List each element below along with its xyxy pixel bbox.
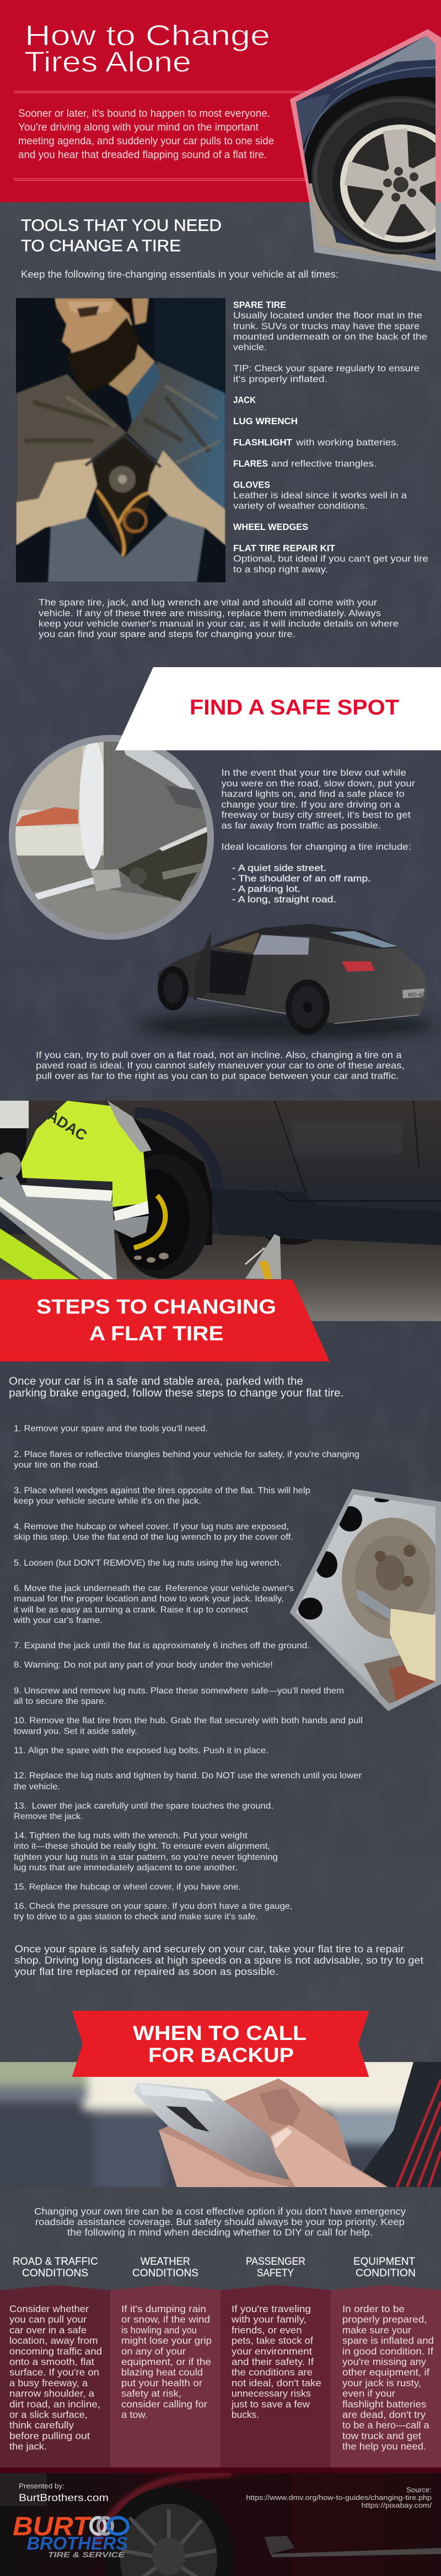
- column: weather conditions: put your health or: [121, 2377, 202, 2388]
- column: road and traffic conditions: location, away from: [9, 2335, 98, 2346]
- column: equipment condition: spare is inflated and: [342, 2335, 434, 2346]
- safe spot closing paragraph: pull over as far to the right as you can to put space between your car and traffic.: [36, 1071, 399, 1081]
- tools list: SPARE TIRE: [233, 300, 286, 310]
- backup intro text: [34, 2206, 406, 2238]
- image: black car with open door: MD-42: [408, 992, 424, 998]
- banner: steps to changing a flat tire: STEPS TO CHANGING: [36, 1296, 276, 1318]
- banner: steps to changing a flat tire: A FLAT TIRE: [89, 1322, 224, 1345]
- safe spot text: - A quiet side street.: [232, 863, 326, 873]
- steps closing paragraph: shop. Driving long distances at high speeds on a spare is not advisable, so try to get: [14, 1955, 423, 1966]
- column: road and traffic conditions: a busy freeway, a: [9, 2377, 88, 2388]
- steps intro: parking brake engaged, follow these steps to change your flat tire.: [9, 1387, 343, 1399]
- tools list: WHEEL WEDGES: [233, 522, 308, 532]
- intro text: You're driving along with your mind on the important: [18, 121, 259, 133]
- steps list: it will be as easy as turning a crank. Raise it up to connect: [14, 1605, 249, 1615]
- tools list: mounted underneath or on the back of the: [233, 332, 427, 342]
- steps closing paragraph: your flat tire replaced or repaired as soon as possible.: [14, 1966, 278, 1977]
- tools list: variety of weather conditions.: [233, 501, 368, 511]
- steps list: 14. Tighten the lug nuts with the wrench. Put your weight: [14, 1831, 248, 1841]
- steps list: 3. Place wheel wedges against the tires opposite of the flat. This will help: [14, 1486, 310, 1496]
- column: equipment condition: your jack is rusty,: [342, 2377, 421, 2388]
- steps list: tighten your lug nuts in a star pattern, so you're never tightening: [14, 1853, 278, 1862]
- footer: sources: https://pixabay.com/: [362, 2502, 432, 2509]
- column: road and traffic conditions: onto a smooth, flat: [9, 2356, 94, 2367]
- dark red divider band: [0, 2467, 441, 2473]
- column: passenger safety: not ideal, don't take: [232, 2377, 321, 2388]
- steps list: the vehicle.: [14, 1782, 60, 1792]
- safe spot text: - The shoulder of an off ramp.: [232, 874, 370, 884]
- section heading: tools: TO CHANGE A TIRE: [21, 237, 181, 255]
- steps list: 12. Replace the lug nuts and tighten by hand. Do NOT use the wrench until you lower: [14, 1771, 362, 1781]
- column: equipment condition: EQUIPMENT: [353, 2256, 415, 2267]
- column: road and traffic conditions: think carefully: [9, 2420, 74, 2431]
- safe spot text: [222, 768, 416, 905]
- safe spot text: Ideal locations for changing a tire include:: [222, 842, 411, 852]
- section heading: tools: TOOLS THAT YOU NEED: [21, 217, 222, 235]
- safe spot closing paragraph: paved road is ideal. If you cannot safely maneuver your car to one of these areas,: [36, 1060, 405, 1070]
- logo: Burt Brothers Tire & Service: [13, 2512, 128, 2559]
- safe spot closing paragraph: If you can, try to pull over on a flat road, not an incline. Also, changing a tire on a: [36, 1050, 402, 1060]
- steps list: 13. Lower the jack carefully until the spare touches the ground.: [14, 1801, 273, 1811]
- column: road and traffic conditions: you can pull your: [9, 2314, 87, 2325]
- column: road and traffic conditions: before pulling out: [9, 2430, 90, 2441]
- banner: when to call for backup: [72, 2011, 369, 2077]
- steps list: Remove the jack.: [14, 1812, 83, 1821]
- steps list: 16. Check the pressure on your spare. If you don't have a tire gauge,: [14, 1902, 293, 1911]
- tools list: Optional, but ideal if you can't get your tire: [233, 554, 428, 564]
- steps intro: [9, 1376, 343, 1399]
- steps list: 15. Replace the hubcap or wheel cover, if you have one.: [14, 1882, 241, 1892]
- column: weather conditions: might lose your grip: [121, 2335, 212, 2346]
- safe spot text: you were on the road, slow down, put your: [222, 779, 416, 789]
- column: passenger safety: SAFETY: [257, 2267, 294, 2279]
- backup intro text: the following in mind when deciding whether to DIY or call for help.: [67, 2227, 373, 2238]
- banner: when to call for backup: FOR BACKUP: [148, 2044, 294, 2066]
- column: weather conditions: equipment, or if the: [121, 2356, 211, 2367]
- footer: sources: Source:: [406, 2486, 432, 2494]
- banner: steps to changing a flat tire: [0, 1280, 330, 1362]
- steps list: with your car's frame.: [13, 1616, 103, 1625]
- banner: find a safe spot: [115, 667, 441, 750]
- steps list: 11. Align the spare with the exposed lug bolts. Push it in place.: [14, 1746, 268, 1755]
- steps list: 4. Remove the hubcap or wheel cover. If your lug nuts are exposed,: [14, 1522, 289, 1531]
- image: wrench on steel wheel in angled frame: [290, 1487, 441, 1711]
- tools closing paragraph: keep your vehicle owner's manual in your car, as it will include details on where: [39, 619, 399, 629]
- column: road and traffic conditions: the jack.: [9, 2441, 47, 2452]
- column: road and traffic conditions: ROAD & TRAFFIC: [13, 2256, 98, 2267]
- steps list: 5. Loosen (but DON'T REMOVE) the lug nuts using the lug wrench.: [14, 1558, 282, 1568]
- steps list: [13, 1424, 363, 1922]
- steps list: your tire on the road.: [14, 1460, 100, 1470]
- column: passenger safety: and their safety. If: [232, 2356, 314, 2367]
- backup intro text: roadside assistance coverage. But safety should always be your top priority. Keep: [35, 2216, 405, 2227]
- column: passenger safety: friends, or even: [232, 2324, 302, 2335]
- tools list: [233, 300, 428, 575]
- steps list: lug nuts that are immediately adjacent to one another.: [14, 1863, 238, 1873]
- column: passenger safety: PASSENGER: [246, 2256, 305, 2267]
- tools list: Usually located under the floor mat in the: [233, 311, 422, 321]
- column: passenger safety: bucks.: [232, 2409, 259, 2420]
- tools list: with working batteries.: [295, 437, 399, 447]
- image: roadside worker changing tire: [0, 1101, 441, 1321]
- steps closing paragraph: [14, 1943, 423, 1977]
- steps list: 2. Place flares or reflective triangles behind your vehicle for safety, if you're changing: [14, 1450, 359, 1459]
- column: weather conditions: on any of your: [121, 2346, 186, 2357]
- column: equipment condition: [331, 2256, 441, 2467]
- tools list: it's properly inflated.: [233, 374, 327, 384]
- tools intro sentence: Keep the following tire-changing essentials in your vehicle at all times:: [21, 269, 338, 280]
- steps list: all to secure the spare.: [14, 1697, 106, 1706]
- column: passenger safety: [220, 2256, 331, 2467]
- column: road and traffic conditions: car over in a safe: [9, 2324, 87, 2335]
- safe spot text: freeway or busy city street, it's best to get: [222, 810, 411, 820]
- column: road and traffic conditions: narrow shoulder, a: [9, 2388, 94, 2399]
- logo: Burt Brothers Tire & Service: BURT: [13, 2512, 92, 2541]
- steps list: skip this step. Use the flat end of the lug wrench to pry the cover off.: [14, 1533, 293, 1542]
- footer: sources: [246, 2486, 432, 2509]
- image: man opening shirt to show gears: [16, 298, 225, 582]
- tools list: FLARES: [233, 459, 268, 469]
- steps list: keep your vehicle secure while it's on the jack.: [14, 1497, 201, 1506]
- column: equipment condition: in good condition. If: [342, 2346, 433, 2357]
- tools closing paragraph: [39, 598, 399, 640]
- column: weather conditions: safety at risk,: [121, 2388, 181, 2399]
- steps list: into it—these should be really tight. To ensure even alignment,: [14, 1842, 270, 1851]
- column: road and traffic conditions: or a slick surface,: [9, 2409, 88, 2420]
- column: passenger safety: the conditions are: [232, 2367, 313, 2378]
- section heading: tools: [21, 217, 222, 255]
- logo: Burt Brothers Tire & Service: TIRE & SERVICE: [48, 2551, 125, 2559]
- column: weather conditions: a tow.: [121, 2409, 148, 2420]
- column: equipment condition: In order to be: [342, 2303, 405, 2314]
- column: weather conditions: If it's dumping rain: [121, 2303, 206, 2314]
- image: jack under tire in circular frame: [9, 735, 215, 942]
- title: Tires Alone: [24, 46, 191, 78]
- steps list: 1. Remove your spare and the tools you'll need.: [14, 1424, 208, 1433]
- column: equipment condition: make sure your: [342, 2324, 411, 2335]
- column: equipment condition: even if your: [342, 2388, 395, 2399]
- column: passenger safety: with your family,: [231, 2314, 306, 2325]
- safe spot text: - A parking lot.: [232, 884, 300, 894]
- tools list: GLOVES: [233, 480, 270, 490]
- steps list: 7. Expand the jack until the flat is approximately 6 inches off the ground.: [14, 1641, 310, 1650]
- column: equipment condition: the help you need.: [342, 2441, 426, 2452]
- footer: presented by: [19, 2482, 109, 2503]
- title: [24, 20, 270, 78]
- column: equipment condition: properly prepared,: [342, 2314, 427, 2325]
- column: equipment condition: flashlight batteries: [342, 2399, 427, 2410]
- column: weather conditions: CONDITIONS: [132, 2267, 198, 2279]
- steps list: try to drive to a gas station to check and make sure it's safe.: [14, 1912, 258, 1922]
- steps list: manual for the proper location and how to work your jack. Ideally,: [14, 1594, 284, 1604]
- column: road and traffic conditions: oncoming traffic and: [9, 2346, 102, 2357]
- intro text: [18, 107, 274, 161]
- logo: Burt Brothers Tire & Service: BROTHERS: [26, 2533, 128, 2553]
- panel: header red background: [0, 0, 441, 202]
- column: passenger safety: pets, take stock of: [232, 2335, 313, 2346]
- column: equipment condition: CONDITION: [356, 2267, 416, 2279]
- column: weather conditions: WEATHER: [141, 2256, 190, 2267]
- tools list: JACK: [233, 396, 256, 405]
- column: road and traffic conditions: dirt road, an incline,: [9, 2399, 100, 2410]
- intro text: Sooner or later, it's bound to happen to most everyone.: [18, 107, 270, 120]
- column: weather conditions: [110, 2256, 220, 2467]
- tools list: Leather is ideal since it works well in a: [233, 490, 407, 500]
- column: equipment condition: tow truck and get: [342, 2430, 421, 2441]
- column: road and traffic conditions: [0, 2256, 110, 2467]
- steps list: 8. Warning: Do not put any part of your body under the vehicle!: [14, 1660, 273, 1670]
- safe spot closing paragraph: [36, 1050, 405, 1081]
- image: black car with open door: [138, 924, 435, 1040]
- column: equipment condition: you're missing any: [342, 2356, 426, 2367]
- column: equipment condition: other equipment, if: [342, 2367, 429, 2378]
- column: passenger safety: just to save a few: [231, 2399, 310, 2410]
- column: passenger safety: If you're traveling: [232, 2303, 311, 2314]
- tools list: trunk. SUVs or trucks may have the spare: [233, 321, 420, 331]
- image: hand holding smartphone: [0, 2055, 441, 2190]
- column: passenger safety: your environment: [232, 2346, 312, 2357]
- safe spot text: hazard lights on, and find a safe place to: [222, 789, 405, 799]
- intro text: and you hear that dreaded flapping sound of a flat tire.: [18, 149, 267, 161]
- footer background: red car wheel: [0, 2473, 441, 2576]
- column: equipment condition: are dead, don't try: [342, 2409, 426, 2420]
- steps list: 10. Remove the flat tire from the hub. Grab the flat securely with both hands and pull: [14, 1716, 363, 1725]
- banner: find a safe spot: FIND A SAFE SPOT: [190, 696, 399, 719]
- banner: when to call for backup: WHEN TO CALL: [133, 2022, 306, 2044]
- column: equipment condition: to be a hero—call a: [342, 2420, 429, 2431]
- column: weather conditions: blazing heat could: [121, 2367, 203, 2378]
- tools list: FLASHLIGHT: [233, 437, 292, 447]
- steps list: 6. Move the jack underneath the car. Reference your vehicle owner's: [14, 1584, 294, 1593]
- steps list: toward you. Set it aside safely.: [14, 1727, 137, 1736]
- footer: presented by: Presented by:: [19, 2482, 64, 2490]
- footer: sources: https://www.dmv.org/how-to-guides/changing-tire.php: [246, 2494, 432, 2502]
- tools list: and reflective triangles.: [271, 459, 377, 469]
- safe spot text: In the event that your tire blew out while: [222, 768, 406, 778]
- image: roadside worker changing tire: ADAC: [45, 1107, 90, 1144]
- column: weather conditions: or snow, if the wind: [121, 2314, 210, 2325]
- column: weather conditions: consider calling for: [121, 2399, 207, 2410]
- safe spot text: - A long, straight road.: [232, 895, 336, 905]
- safe spot text: change your tire. If you are driving on a: [222, 800, 400, 810]
- title: How to Change: [25, 20, 270, 52]
- column: passenger safety: unnecessary risks: [232, 2388, 311, 2399]
- intro text: meeting agenda, and suddenly your car pulls to one side: [18, 135, 274, 147]
- tools closing paragraph: The spare tire, jack, and lug wrench are vital and should all come with your: [39, 598, 378, 608]
- tools list: FLAT TIRE REPAIR KIT: [233, 543, 335, 553]
- column: road and traffic conditions: surface. If you're on: [9, 2367, 99, 2378]
- footer: presented by: BurtBrothers.com: [19, 2492, 109, 2503]
- steps closing paragraph: Once your spare is safely and securely on your car, take your flat tire to a repair: [14, 1943, 404, 1955]
- tools list: vehicle.: [233, 343, 267, 353]
- safe spot text: as far away from traffic as possible.: [222, 821, 381, 831]
- steps list: 9. Unscrew and remove lug nuts. Place these somewhere safe—you'll need them: [14, 1686, 344, 1696]
- column: road and traffic conditions: CONDITIONS: [22, 2267, 88, 2279]
- backup intro text: Changing your own tire can be a cost effective option if you don't have emergency: [34, 2206, 406, 2217]
- column: road and traffic conditions: Consider whether: [9, 2303, 89, 2314]
- column: weather conditions: is howling and you: [121, 2324, 197, 2335]
- steps intro: Once your car is in a safe and stable area, parked with the: [9, 1376, 303, 1388]
- tools list: LUG WRENCH: [233, 416, 298, 426]
- image: flat tire in angled frame: [290, 29, 441, 272]
- tools closing paragraph: you can find your spare and steps for changing your tire.: [39, 630, 295, 640]
- tools closing paragraph: vehicle. If any of these three are missing, replace them immediately. Always: [39, 608, 381, 618]
- tools list: to a shop right away.: [233, 565, 328, 575]
- tools list: TIP: Check your spare regularly to ensure: [233, 364, 420, 374]
